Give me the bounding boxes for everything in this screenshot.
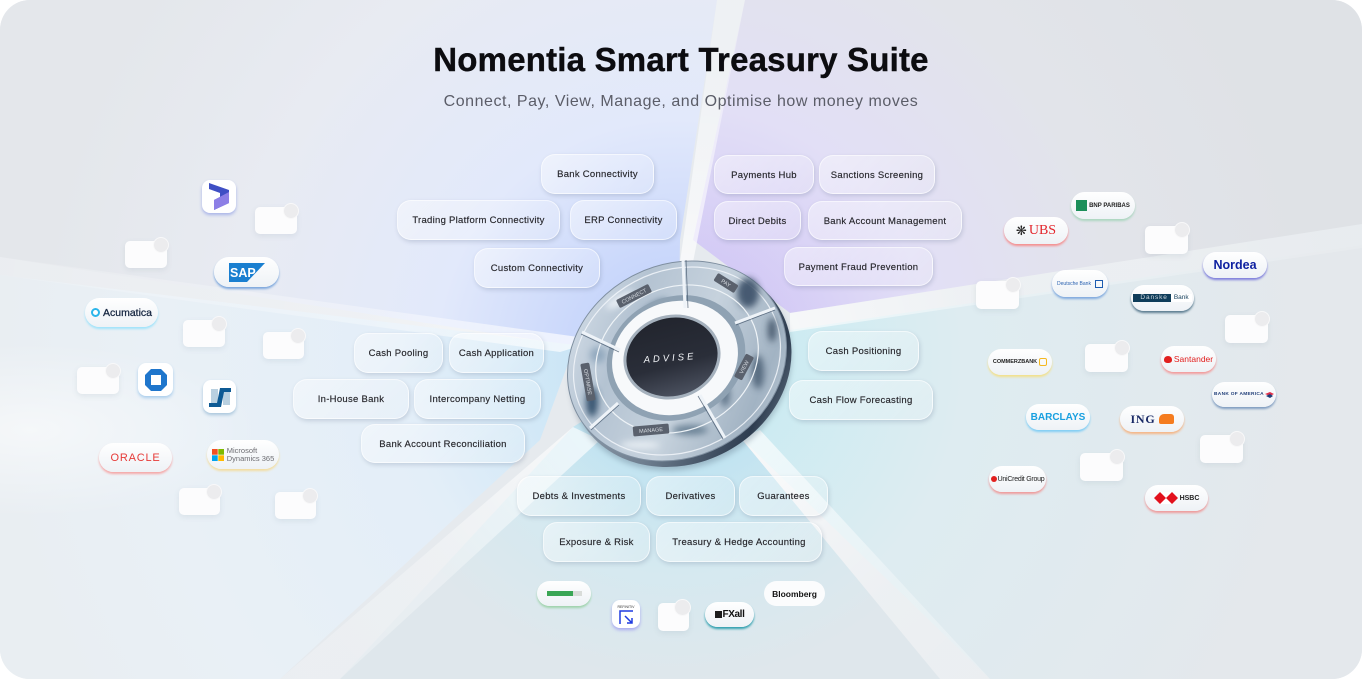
Derivatives: Derivatives (665, 491, 716, 502)
ERP Connectivity: ERP Connectivity (584, 215, 663, 226)
Payment Fraud Prevention (784, 247, 933, 286)
Direct Debits (714, 201, 801, 240)
Payment Fraud Prevention: Payment Fraud Prevention (799, 262, 918, 272)
segment labels: OPTIMISE (582, 369, 592, 396)
Bank Account Reconciliation (361, 424, 525, 463)
logo: Barclays: BARCLAYS (1031, 412, 1085, 422)
Treasury & Hedge Accounting: Treasury & Hedge Accounting (672, 537, 806, 548)
logo: Bank of America: BANK OF AMERICA (1214, 392, 1264, 397)
title: Nomentia Smart Treasury Suite (433, 41, 929, 78)
ERP Connectivity (570, 200, 677, 240)
logo: HSBC (1145, 485, 1208, 511)
logo: Acumatica (85, 298, 158, 327)
In-House Bank: In-House Bank (318, 394, 384, 405)
segment labels: CONNECT (621, 288, 648, 306)
Treasury & Hedge Accounting (656, 522, 822, 562)
Cash Positioning: Cash Positioning (826, 346, 901, 357)
Trading Platform Connectivity (397, 200, 560, 240)
logo: UniCredit Group: UniCredit Group (998, 476, 1044, 482)
logo: Acumatica: Acumatica (103, 306, 152, 318)
Cash Pooling: Cash Pooling (369, 348, 428, 359)
segment dividers (582, 260, 775, 438)
logo: green trade logo (537, 581, 591, 606)
Exposure & Risk: Exposure & Risk (559, 537, 634, 548)
logo: HSBC: HSBC (1180, 494, 1199, 502)
logo: BNP Paribas (1071, 192, 1135, 219)
Intercompany Netting (414, 379, 541, 419)
Direct Debits: Direct Debits (728, 216, 786, 226)
Derivatives (646, 476, 735, 516)
icon: Refinitiv: REFINITIV (618, 604, 634, 608)
panel: pay modules (714, 155, 964, 290)
subtitle: Connect, Pay, View, Manage, and Optimise how money moves (444, 93, 918, 110)
logo: Microsoft Dynamics 365 (207, 440, 279, 469)
logo: Danske Bank (1131, 285, 1194, 311)
Custom Connectivity: Custom Connectivity (491, 263, 583, 274)
logo: Commerzbank (988, 349, 1052, 375)
icon: Chase (138, 363, 173, 396)
Exposure & Risk (543, 522, 650, 562)
central dial: Advise wheel: ADVISE (642, 351, 697, 366)
Guarantees: Guarantees (757, 491, 810, 502)
logo: UBS: ❋ (1016, 222, 1027, 238)
logo: ING (1120, 406, 1184, 432)
icon: Refinitiv (612, 600, 640, 628)
icon: Dynamics (202, 180, 236, 213)
Trading Platform Connectivity: Trading Platform Connectivity (412, 215, 545, 226)
icon: N square (203, 380, 236, 413)
logo: Santander: Santander (1174, 354, 1213, 364)
Cash Application (449, 333, 544, 373)
Custom Connectivity (474, 248, 600, 288)
In-House Bank (293, 379, 409, 419)
logo: Deutsche Bank: Deutsche Bank (1057, 280, 1091, 286)
logo: BNP Paribas: BNP PARIBAS (1089, 202, 1130, 208)
logo: UniCredit Group (989, 466, 1046, 492)
logo: Microsoft Dynamics 365: Microsoft (227, 446, 257, 455)
logo: Barclays (1026, 404, 1090, 430)
segment labels: MANAGE (639, 427, 664, 435)
logo: Danske Bank: Bank (1174, 294, 1189, 301)
Payments Hub: Payments Hub (731, 170, 797, 180)
Bank Account Management (808, 201, 962, 240)
Guarantees (739, 476, 828, 516)
Sanctions Screening (819, 155, 935, 194)
segment labels: PAY (720, 279, 732, 289)
ring shading (586, 278, 776, 449)
logo: Oracle: ORACLE (110, 452, 161, 464)
central dial: Advise wheel (567, 260, 794, 473)
logo: Danske Bank: Danske (1140, 294, 1168, 301)
logo: SAP: SAP (230, 266, 255, 280)
Bank Account Reconciliation: Bank Account Reconciliation (379, 438, 507, 450)
logo: UBS: UBS (1029, 222, 1056, 238)
logo: Bank of America (1212, 382, 1276, 407)
Cash Pooling (354, 333, 443, 373)
Cash Application: Cash Application (459, 348, 534, 359)
logo: FXall: FXall (723, 609, 744, 620)
Debts & Investments: Debts & Investments (533, 491, 625, 502)
Bank Connectivity (541, 154, 654, 194)
Bank Connectivity: Bank Connectivity (557, 169, 638, 180)
segment labels: VIEW (739, 359, 751, 375)
Cash Positioning (808, 331, 919, 371)
panel: optimise modules (292, 333, 546, 466)
logo: Nordea: Nordea (1213, 258, 1257, 272)
Intercompany Netting: Intercompany Netting (430, 394, 525, 405)
logo: FXall (705, 602, 754, 627)
logo: Oracle (99, 443, 172, 472)
logo: Deutsche Bank (1052, 270, 1108, 297)
logo: Nordea (1203, 252, 1267, 278)
panel: view modules (788, 331, 936, 424)
panel: manage modules (516, 476, 830, 566)
logo: Bloomberg: Bloomberg (772, 588, 817, 598)
center hub (614, 304, 730, 410)
logo: Microsoft Dynamics 365: Dynamics 365 (227, 454, 274, 462)
Bank Account Management: Bank Account Management (824, 216, 946, 226)
Debts & Investments (517, 476, 641, 516)
logo: Commerzbank: COMMERZBANK (993, 359, 1037, 365)
Payments Hub (714, 155, 814, 194)
segment labels (580, 273, 754, 437)
logo: Bloomberg (764, 581, 825, 606)
logo: ING: ING (1130, 412, 1156, 426)
Sanctions Screening: Sanctions Screening (831, 170, 923, 180)
logo: Santander (1161, 346, 1216, 372)
Cash Flow Forecasting: Cash Flow Forecasting (809, 395, 913, 406)
Cash Flow Forecasting (789, 380, 933, 420)
logo: UBS (1004, 217, 1068, 244)
logo: SAP (214, 257, 279, 287)
panel: connect modules (396, 154, 680, 292)
